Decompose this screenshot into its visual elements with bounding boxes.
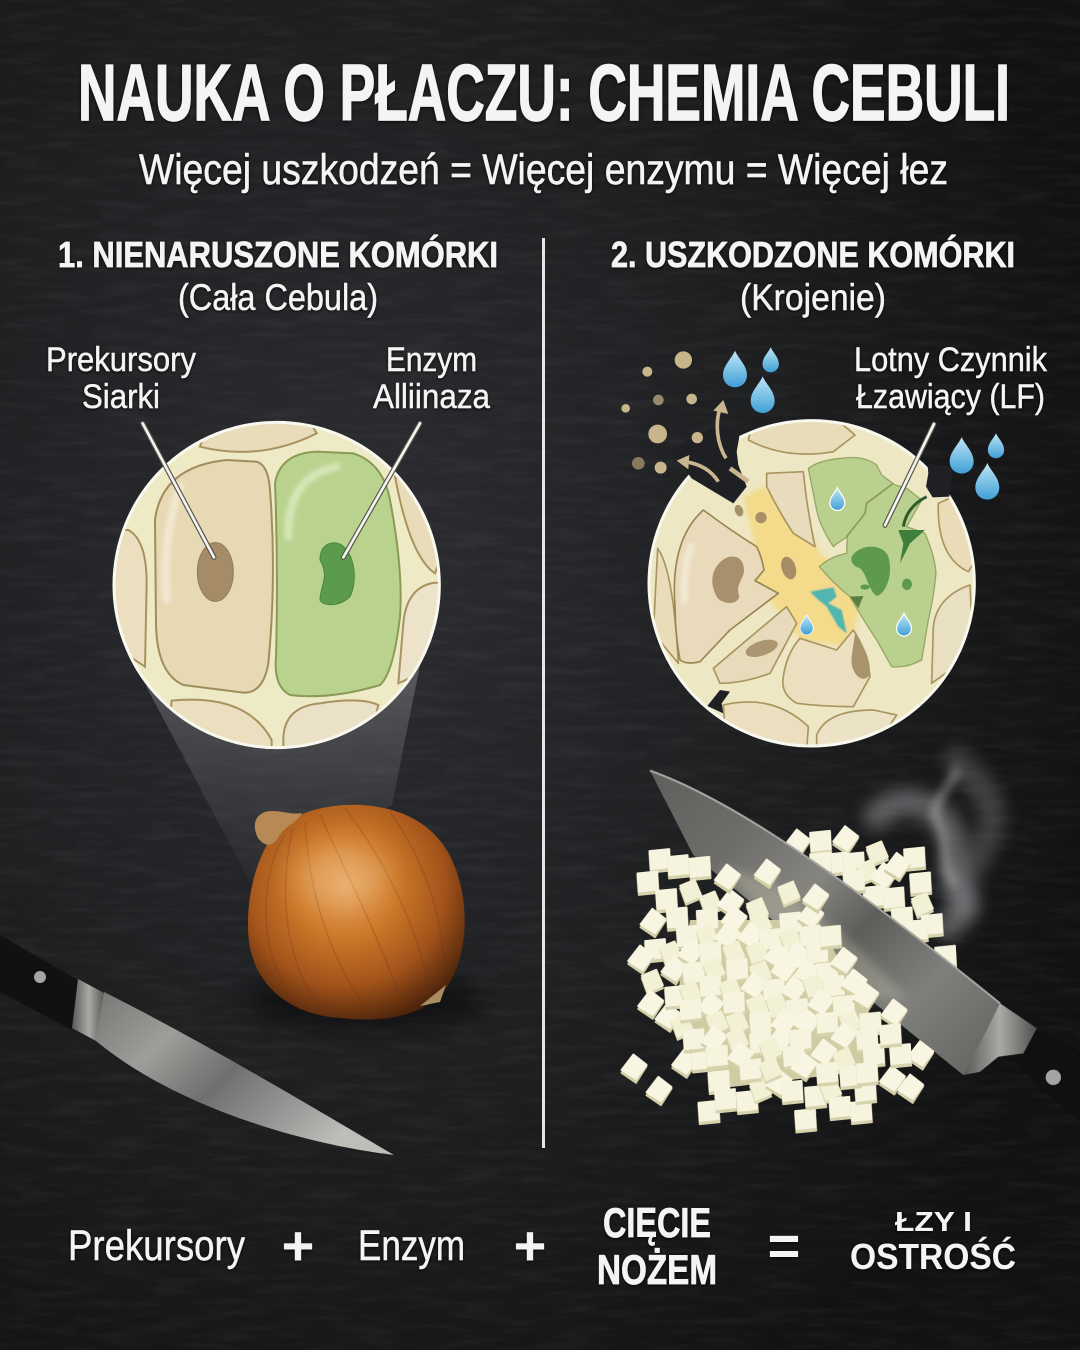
label: alliinase enzyme: [373, 341, 490, 416]
magnifier beam: [146, 655, 422, 882]
term: knife cut: CIĘCIE: [603, 1199, 711, 1246]
subheading: cutting: (Krojenie): [740, 277, 886, 318]
pointer line: lachrymatory factor: [885, 424, 934, 525]
broken cell nucleus: [712, 557, 744, 603]
label: alliinase enzyme: Enzym: [386, 341, 477, 379]
dice behind blade: [785, 826, 956, 969]
green organelle: [851, 547, 890, 596]
escaping droplets left: [723, 347, 779, 413]
chef knife: [650, 771, 1080, 1127]
green ruptured cell: [808, 457, 936, 667]
plus sign 1: +: [282, 1214, 314, 1277]
term: knife cut: [597, 1199, 717, 1293]
magnified intact cells: [110, 417, 443, 753]
pointer line: enzyme: [343, 423, 420, 557]
dice pile: [621, 849, 933, 1133]
term: knife cut: NOŻEM: [597, 1246, 717, 1293]
equals sign: =: [768, 1214, 800, 1277]
chopped onion and knife: [621, 771, 1080, 1133]
label: lachrymatory factor: Łzawiący (LF): [856, 378, 1045, 416]
result: tears and pungency: [850, 1206, 1016, 1277]
label: sulfur precursors: [46, 341, 196, 416]
result: tears and pungency: OSTROŚĆ: [850, 1235, 1016, 1277]
label: sulfur precursors: Prekursory: [46, 341, 196, 379]
sulfur particles: [621, 351, 703, 474]
heading: intact cells: 1. NIENARUSZONE KOMÓRKI: [58, 233, 498, 275]
onion: [245, 805, 485, 1026]
label: alliinase enzyme: Alliinaza: [373, 378, 490, 416]
steam: [877, 760, 992, 927]
knife: left: [0, 935, 394, 1155]
cyan chemical: [810, 587, 847, 633]
plus sign 2: +: [514, 1214, 546, 1277]
pointer line: precursors: [143, 423, 214, 557]
label: sulfur precursors: Siarki: [82, 378, 160, 416]
nucleus: sulfur precursors: [197, 543, 233, 601]
magnified damaged cells: [621, 347, 1004, 750]
term: precursors: Prekursory: [68, 1222, 245, 1270]
center divider: [542, 238, 545, 1148]
release arrows: [677, 400, 748, 482]
heading: damaged cells: 2. USZKODZONE KOMÓRKI: [611, 233, 1015, 275]
organelle: alliinase: [320, 543, 354, 605]
result: tears and pungency: ŁZY I: [895, 1206, 972, 1237]
label: lachrymatory factor: Lotny Czynnik: [854, 341, 1048, 379]
crack notches: [670, 423, 747, 503]
inner droplets: [800, 488, 911, 636]
term: enzyme: Enzym: [358, 1222, 465, 1270]
subheading: whole onion: (Cała Cebula): [178, 277, 378, 318]
label: lachrymatory factor: [854, 341, 1048, 416]
panel: damaged cells: [611, 233, 1048, 750]
yellow released fluid: [743, 487, 860, 647]
equation row: [68, 1199, 1016, 1293]
escaping droplets right: [950, 433, 1004, 500]
subtitle: Więcej uszkodzeń = Więcej enzymu = Więcej łez: [139, 146, 948, 194]
panel: intact cells: [46, 233, 498, 882]
